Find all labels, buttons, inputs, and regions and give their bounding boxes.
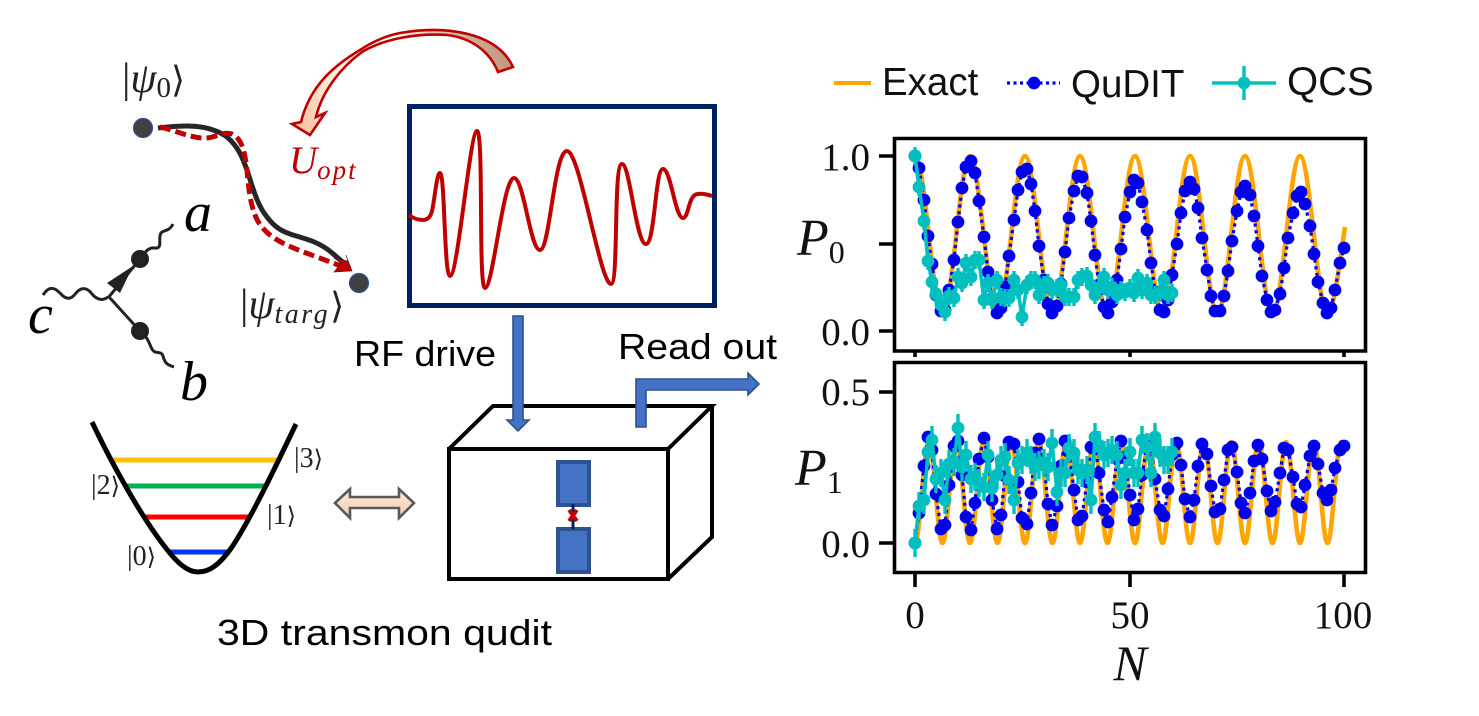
Feynman vertex diagram: [28, 182, 212, 413]
series: QuDIT P0: [915, 156, 1344, 313]
arrow: read out from cavity: [636, 373, 759, 427]
axis label P1: P: [795, 440, 827, 497]
level |0>: [170, 550, 228, 554]
node: initial state: [134, 118, 152, 138]
x tick label 0: 0: [905, 594, 925, 637]
double arrow: level diagram equals transmon: [335, 489, 414, 518]
RF waveform: [409, 131, 712, 288]
axis label P0: P: [797, 210, 829, 267]
wavy lines: c, a, b: [43, 224, 174, 367]
legend marker: QuDIT: [1028, 77, 1040, 89]
label: initial state: ⟩: [171, 60, 185, 100]
transmon pad: top: [558, 462, 589, 505]
chart frame and ticks: [879, 138, 1366, 357]
chart: P1 vs N: [794, 362, 1372, 691]
pulse waveform panel: [409, 106, 714, 306]
arrowhead: path end: [334, 255, 352, 272]
panel frame: [410, 106, 714, 306]
legend text: Exact: Exact: [882, 61, 979, 104]
label: target state: targ: [275, 299, 330, 330]
x tick label 100: 100: [1314, 594, 1372, 637]
transmon cavity box: [449, 406, 712, 579]
series: QCS P0: [915, 156, 1172, 317]
label: b: b: [180, 351, 208, 413]
label: a: a: [184, 182, 212, 244]
label: RF drive: RF drive: [354, 333, 496, 374]
arrow: RF drive into cavity: [507, 316, 529, 431]
tick label 1.0: 1.0: [821, 136, 870, 179]
legend marker: QCS: [1238, 77, 1250, 89]
label: initial state: 0: [157, 72, 171, 104]
ket |0>: |0⟩: [127, 541, 156, 572]
cavity outline: [449, 406, 712, 579]
chart: P0 vs N: [796, 136, 1366, 357]
vertex dots: [131, 259, 149, 331]
legend line: QCS: [1212, 66, 1276, 100]
propagator lines: [108, 259, 140, 331]
potential well: [92, 422, 296, 572]
label: U_opt: opt: [317, 155, 358, 185]
legend line: QuDIT: [1007, 81, 1060, 85]
energy level diagram: [91, 422, 323, 572]
label: U_opt: U: [289, 139, 317, 182]
series: exact P0: [915, 156, 1345, 313]
legend line: Exact: [834, 81, 871, 85]
x axis label N: N: [1112, 635, 1149, 691]
ket |2>: |2⟩: [91, 470, 120, 501]
propagator arrowhead: [107, 266, 133, 293]
ket |3>: |3⟩: [294, 443, 323, 474]
chart frame and ticks: [879, 362, 1366, 587]
legend: [834, 60, 1374, 106]
optimised path: red dashed curve: [160, 127, 346, 268]
legend text: QCS: QCS: [1287, 60, 1374, 104]
x tick label 50: 50: [1110, 594, 1150, 637]
node: target state: [350, 274, 368, 292]
series: QCS P1: [915, 428, 1172, 543]
curved arrow: U_opt feedback: [292, 30, 513, 135]
Josephson junction cross: [569, 510, 577, 521]
tick label 0.5: 0.5: [821, 371, 870, 414]
tick label 0.0: 0.0: [821, 311, 870, 354]
axis label P1: 1: [827, 464, 843, 500]
junction wire: [572, 504, 574, 529]
series: QuDIT P1: [915, 437, 1344, 543]
tick label 0.0: 0.0: [821, 523, 870, 566]
series: exact P1: [915, 442, 1345, 543]
optimal path diagram: state transfer: [122, 56, 368, 330]
level |1>: [143, 514, 251, 520]
transmon pad: bottom: [558, 529, 589, 572]
label: c: c: [28, 284, 53, 346]
target path: black curve: [158, 126, 349, 268]
caption: 3D transmon qudit: 3D transmon qudit: [217, 612, 552, 653]
axis label P0: 0: [829, 234, 845, 270]
level |2>: [126, 484, 267, 488]
label: target state: |ψ: [240, 282, 275, 328]
legend text: QuDIT: QuDIT: [1071, 63, 1184, 106]
label: initial state: |ψ: [122, 56, 157, 102]
level |3>: [113, 458, 279, 462]
label: target state: ⟩: [330, 286, 344, 326]
ket |1>: |1⟩: [267, 500, 296, 531]
label: Read out: Read out: [618, 326, 777, 367]
